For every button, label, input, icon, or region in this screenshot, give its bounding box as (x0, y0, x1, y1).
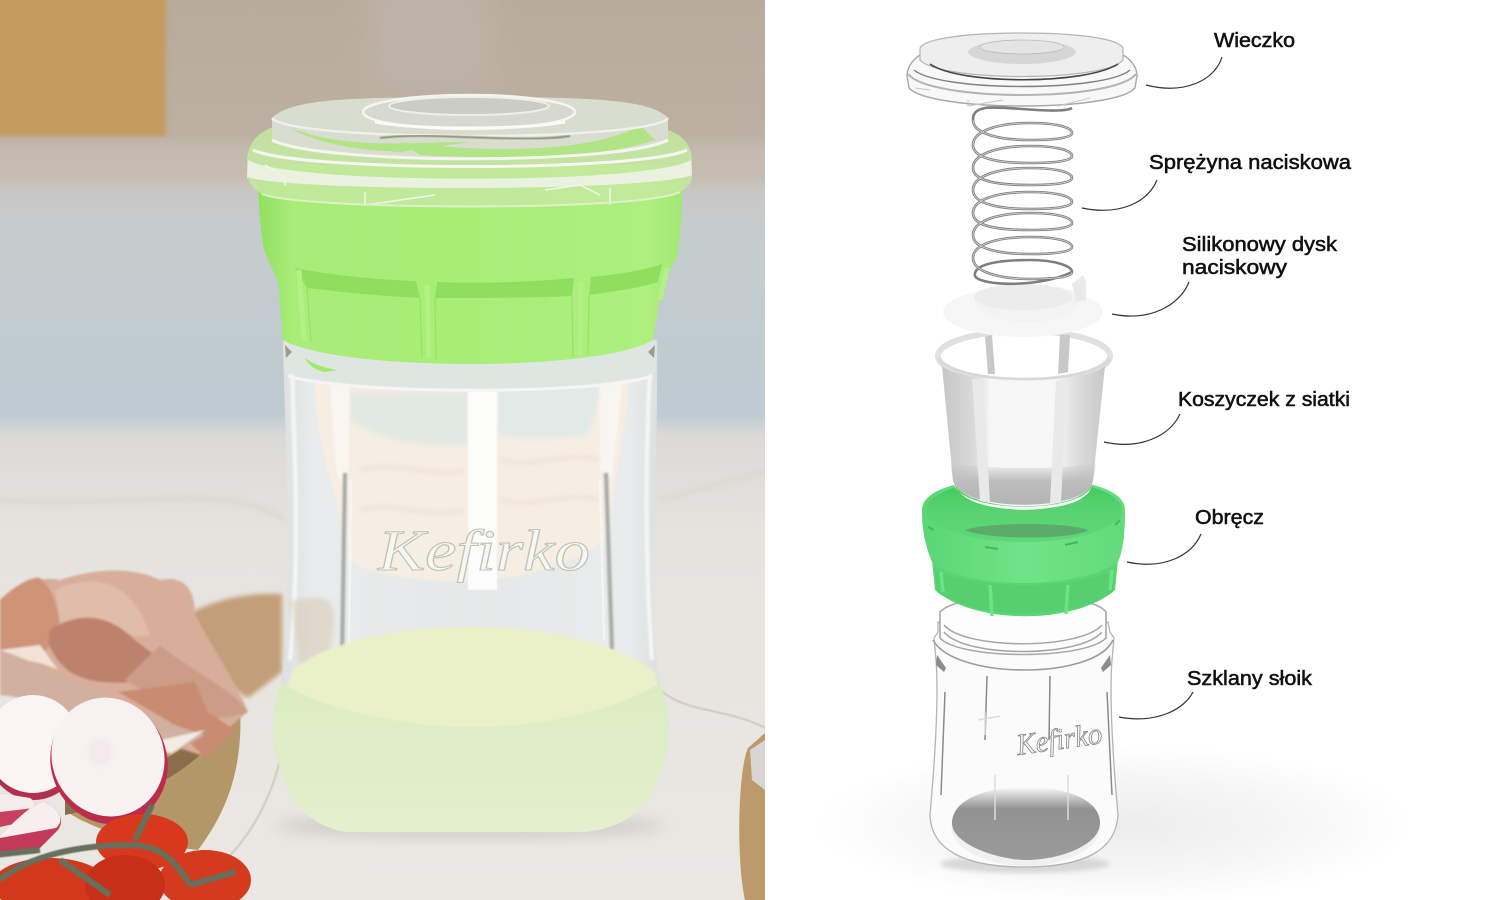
photo background (0, 0, 810, 900)
ring body (258, 165, 683, 364)
jar ribs (290, 370, 652, 670)
label: lid (1146, 30, 1295, 88)
embossed logo: Kefirko (377, 518, 590, 583)
lid centre button (363, 95, 575, 129)
part: glass jar: Kefirko (1013, 717, 1104, 762)
radish slice: left (0, 695, 69, 800)
ring lower band (932, 560, 1118, 616)
floor shadow (815, 745, 1415, 900)
lid flange (247, 128, 692, 206)
back wooden board (194, 590, 285, 700)
tomatoes and vine (0, 805, 251, 900)
label: ring: Obręcz (1195, 507, 1264, 529)
white strainer rib (468, 385, 497, 590)
lid centre button (967, 39, 1077, 65)
front wooden board (65, 716, 240, 850)
whey in jar (280, 625, 662, 730)
ring inner wall (926, 478, 1122, 542)
jar shadow (275, 814, 665, 838)
green ring (258, 165, 683, 364)
lid flange (907, 55, 1137, 106)
ham slices (0, 571, 248, 758)
lid upper dome (272, 97, 668, 159)
jar neck (283, 340, 657, 390)
label: spring (1082, 152, 1352, 210)
lid upper (920, 33, 1123, 76)
part: green ring (922, 478, 1125, 616)
basket mesh (942, 366, 1105, 506)
radish slices (0, 695, 168, 852)
milky liquid in jar (273, 683, 668, 832)
label: ring (1127, 507, 1264, 564)
glass jar body (273, 345, 668, 832)
ring panel seams and ribs (299, 268, 667, 360)
wooden board at right edge (739, 733, 765, 900)
label: glass jar (1119, 668, 1313, 719)
ring recessed shadow band (295, 264, 662, 298)
exploded view of the parts (815, 33, 1415, 900)
label: glass jar: Szklany słoik (1187, 668, 1313, 690)
part: glass jar (930, 596, 1118, 873)
label: silicone disc (1112, 234, 1338, 316)
label: spring: Sprężyna naciskowa (1149, 152, 1352, 174)
label: mesh basket (1104, 389, 1350, 444)
small radish slices (0, 793, 61, 852)
part: silicone disc (943, 275, 1103, 337)
radish slice: right (50, 698, 168, 824)
white panel (765, 0, 1500, 900)
label: mesh basket: Koszyczek z siatki (1178, 389, 1350, 411)
basket rim and back ribs (938, 331, 1110, 381)
label: silicone disc: naciskowy (1182, 257, 1287, 279)
ring upper band (922, 478, 1125, 583)
clear lid (247, 95, 692, 206)
part: spring (973, 107, 1072, 284)
label: silicone disc: Silikonowy dysk (1182, 234, 1338, 256)
label: lid: Wieczko (1214, 30, 1295, 52)
part: lid (907, 33, 1137, 106)
photo panel: Kefirko jar on kitchen counter (0, 0, 810, 900)
part: mesh basket (938, 331, 1110, 510)
kefir cloth inside jar (315, 380, 628, 582)
